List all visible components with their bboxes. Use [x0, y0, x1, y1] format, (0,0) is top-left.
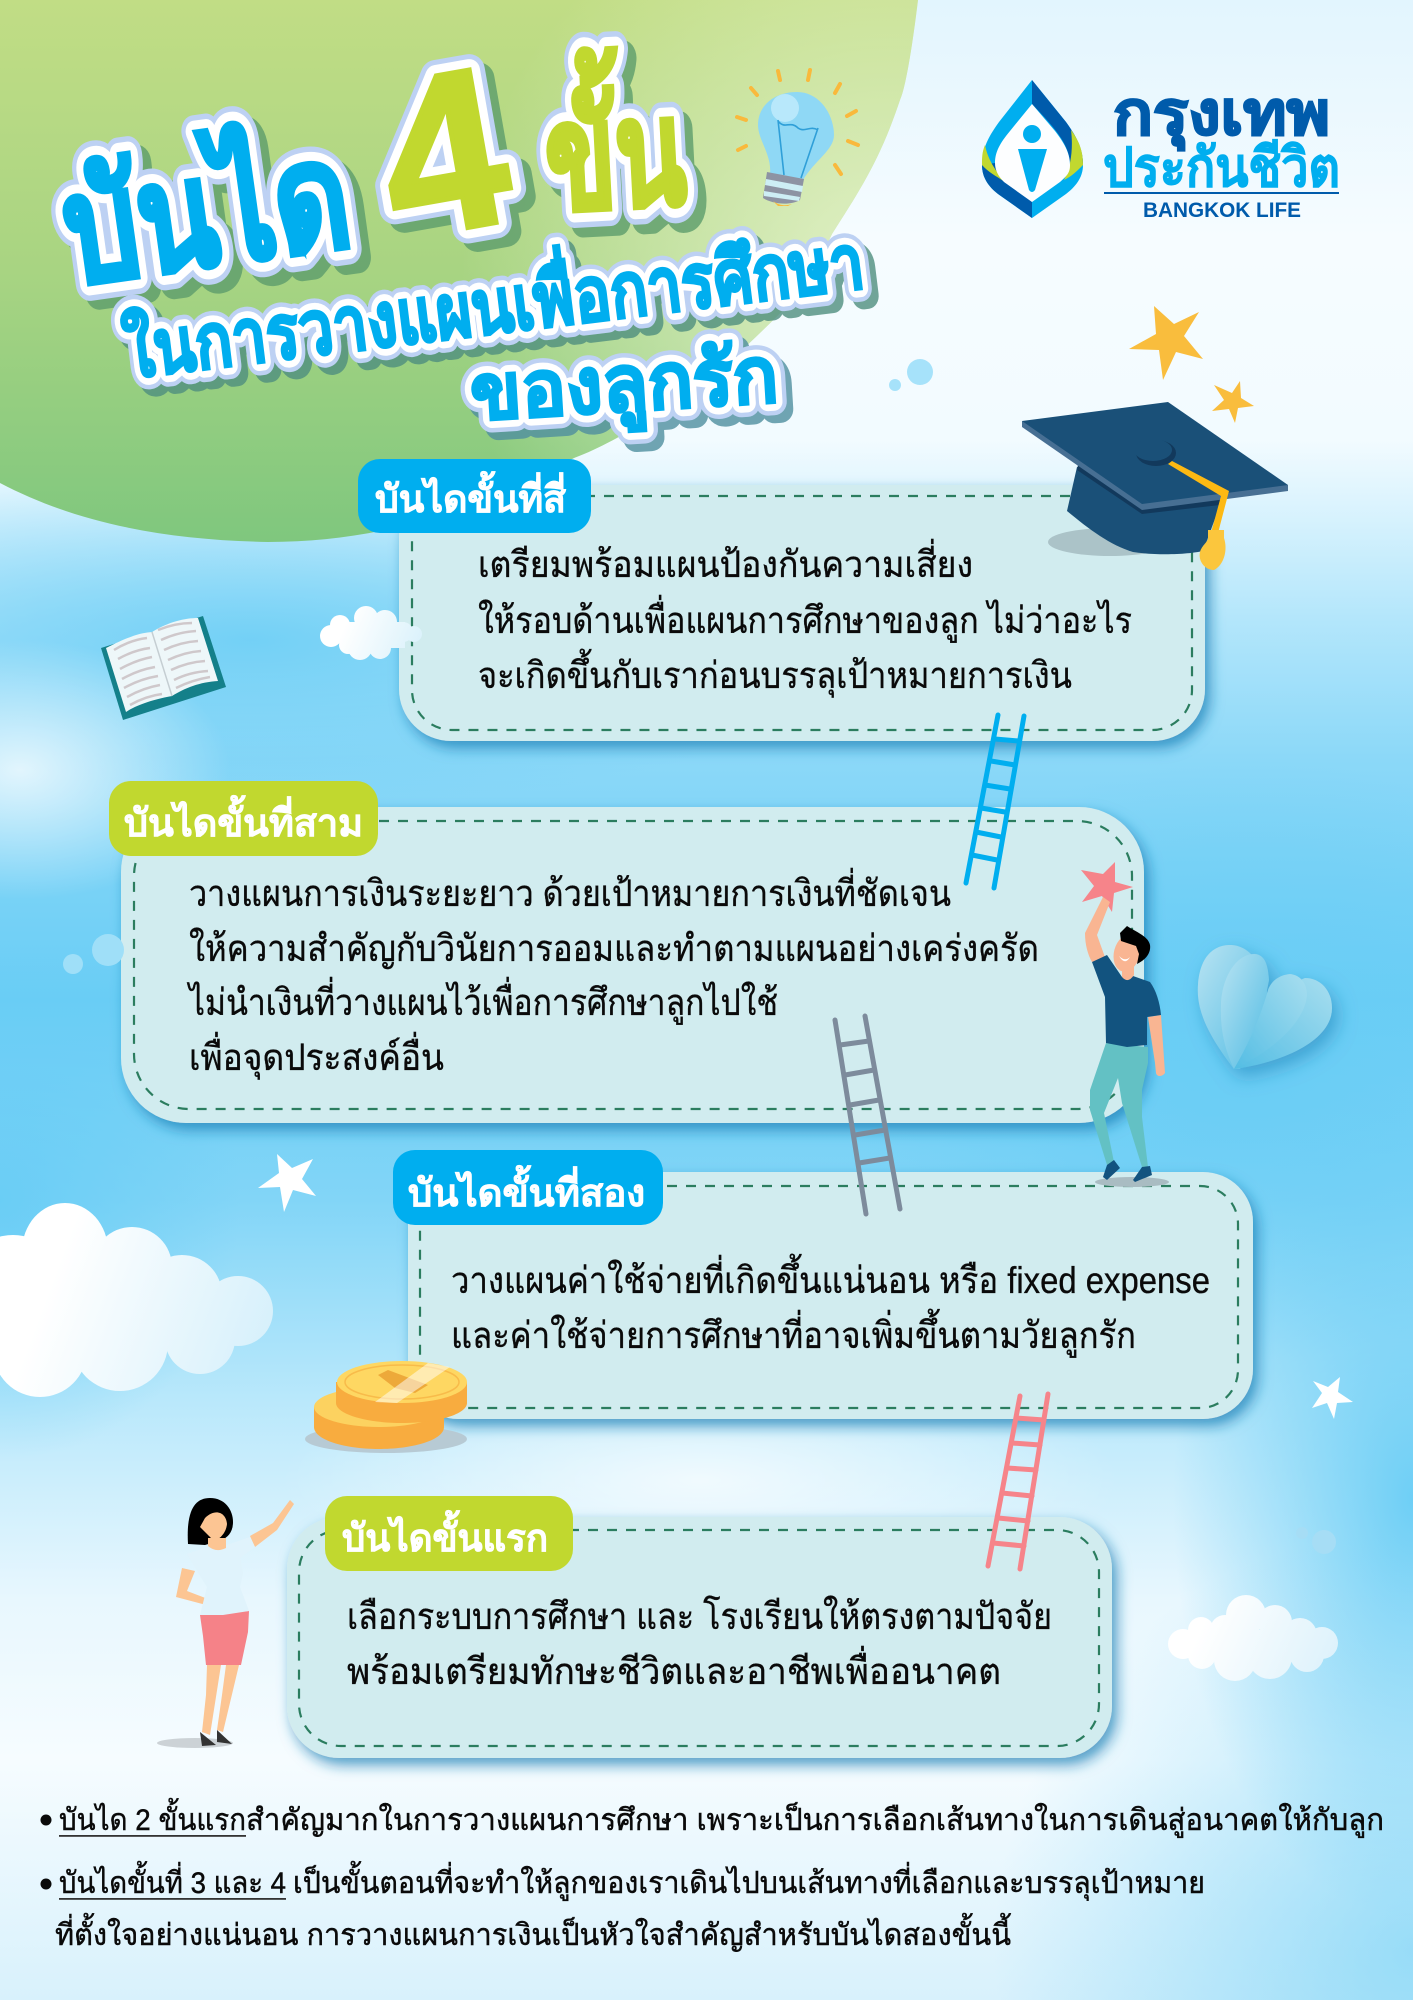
- ladder: grey: [835, 1016, 900, 1214]
- icon: pink star: [1081, 862, 1133, 912]
- icon: large cloud: [0, 1203, 273, 1397]
- title line: บันได: บันได: [62, 117, 369, 324]
- note 1: บันได 2 ขั้นแรก: [59, 1798, 246, 1837]
- subtitle line: ในการวางแผนเพื่อการศึกษา: [117, 208, 869, 395]
- step 4 text: จะเกิดขึ้นกับเราก่อนบรรลุเป้าหมายการเงิน: [478, 648, 1072, 698]
- icon: coins: [305, 1361, 467, 1453]
- step 4 text: เตรียมพร้อมแผนป้องกันความเสี่ยง: [478, 538, 973, 585]
- step 1 label: บันไดขั้นแรก: [342, 1510, 548, 1560]
- subtitle line: ของลูกรัก: ของลูกรัก: [468, 330, 781, 442]
- step 4 text: [478, 538, 1132, 698]
- footer notes: [40, 1798, 1384, 1952]
- step 1 label: [325, 1496, 573, 1571]
- icon: bubbles left: [63, 934, 124, 974]
- illustration: man reaching for star: [1085, 897, 1169, 1187]
- step 3 text: ให้ความสำคัญกับวินัยการออมและทำตามแผนอย่างเคร่งครัด: [189, 927, 1039, 970]
- logo text: Thai name line 2: ประกันชีวิต: [1103, 138, 1340, 198]
- bubbles near title: [889, 359, 933, 391]
- title number: 4: 4: [371, 26, 535, 296]
- icon: paper heart: [1198, 945, 1332, 1069]
- note 1: [40, 1798, 1384, 1838]
- logo mark: [982, 80, 1083, 218]
- icon: bubbles right: [1296, 1527, 1336, 1554]
- title line: บันได: บันได: [53, 109, 360, 316]
- logo: Bangkok Life: [982, 80, 1340, 222]
- icon: white star left: [258, 1154, 316, 1212]
- icon: gold stars: [1129, 306, 1254, 423]
- logo text: English name: BANGKOK LIFE: [1143, 199, 1301, 222]
- step 1 text: [347, 1595, 1052, 1692]
- step 2 text: และค่าใช้จ่ายการศึกษาที่อาจเพิ่มขึ้นตามวัยลูกรัก: [451, 1308, 1136, 1358]
- panel: step 1: [287, 1496, 1112, 1758]
- step 2 label: บันไดขั้นที่สอง: [408, 1165, 645, 1215]
- ladder: pink: [988, 1394, 1048, 1569]
- illustration: woman pointing up: [157, 1498, 294, 1748]
- icon: open book: [101, 616, 226, 720]
- title number: 4: 4: [362, 18, 525, 287]
- icon: white star right: [1312, 1377, 1353, 1419]
- step 4 text: ให้รอบด้านเพื่อแผนการศึกษาของลูก ไม่ว่าอะไร: [478, 594, 1132, 643]
- step 3 text: วางแผนการเงินระยะยาว ด้วยเป้าหมายการเงินที่ชัดเจน: [189, 867, 951, 914]
- subtitle line: ในการวางแผนเพื่อการศึกษา: [117, 208, 869, 395]
- title line: ขั้น: ขั้น: [540, 43, 689, 242]
- green circle header background: [0, 0, 918, 542]
- subtitle line: ในการวางแผนเพื่อการศึกษา: [117, 208, 869, 395]
- subtitle line: ของลูกรัก: ของลูกรัก: [468, 330, 781, 442]
- step 1 text: พร้อมเตรียมทักษะชีวิตและอาชีพเพื่ออนาคต: [347, 1645, 1001, 1692]
- panel: step 2: [393, 1150, 1253, 1419]
- title: [53, 17, 875, 450]
- subtitle line: ของลูกรัก: ของลูกรัก: [468, 330, 781, 442]
- step 2 label: [393, 1150, 663, 1225]
- step 4 label: บันไดขั้นที่สี่: [375, 471, 567, 521]
- note 2: [40, 1861, 1205, 1952]
- title number: 4: 4: [362, 18, 525, 287]
- title number: 4: 4: [362, 18, 525, 287]
- title line: บันได: บันได: [53, 109, 360, 316]
- title line: ขั้น: ขั้น: [540, 43, 689, 242]
- title line: บันได: บันได: [53, 109, 360, 316]
- step 4 label: [358, 459, 591, 533]
- title line: ขั้น: ขั้น: [540, 43, 689, 242]
- logo text: Thai name: กรุงเทพ: [1113, 80, 1330, 151]
- note 2: ที่ตั้งใจอย่างแน่นอน การวางแผนการเงินเป็นหัวใจสำคัญสำหรับบันไดสองขั้นนี้: [55, 1913, 1011, 1952]
- panel: step 3: [109, 781, 1144, 1123]
- step 3 text: เพื่อจุดประสงค์อื่น: [189, 1031, 444, 1080]
- note 2: บันไดขั้นที่ 3 และ 4: [59, 1861, 286, 1900]
- step 3 label: [109, 781, 378, 856]
- panel: step 4: [358, 459, 1205, 741]
- icon: graduation cap: [1022, 402, 1288, 570]
- step 2 text: วางแผนค่าใช้จ่ายที่เกิดขึ้นแน่นอน หรือ fixed expense: [451, 1253, 1210, 1301]
- step 1 text: เลือกระบบการศึกษา และ โรงเรียนให้ตรงตามปัจจัย: [347, 1595, 1052, 1637]
- title line: ขั้น: ขั้น: [548, 52, 698, 252]
- step 2 text: [451, 1253, 1210, 1358]
- title line: ขั้น: [540, 42, 698, 252]
- step 3 label: บันไดขั้นที่สาม: [124, 795, 363, 845]
- subtitle line: ของลูกรัก: ของลูกรัก: [474, 338, 787, 450]
- step 3 text: [186, 867, 1039, 1080]
- note 2: เป็นขั้นตอนที่จะทำให้ลูกของเราเดินไปบนเส้นทางที่เลือกและบรรลุเป้าหมาย: [293, 1861, 1205, 1902]
- ladder: blue: [966, 715, 1024, 888]
- icon: light bulb: [737, 70, 858, 206]
- icon: cloud right: [1168, 1595, 1338, 1681]
- note 1: สำคัญมากในการวางแผนการศึกษา เพราะเป็นการเลือกเส้นทางในการเดินสู่อนาคตให้กับลูก: [246, 1801, 1384, 1838]
- subtitle line: ในการวางแผนเพื่อการศึกษา: [124, 215, 875, 402]
- step 3 text: ไม่นำเงินที่วางแผนไว้เพื่อการศึกษาลูกไปใช้: [186, 976, 778, 1025]
- icon: small cloud: [320, 606, 422, 660]
